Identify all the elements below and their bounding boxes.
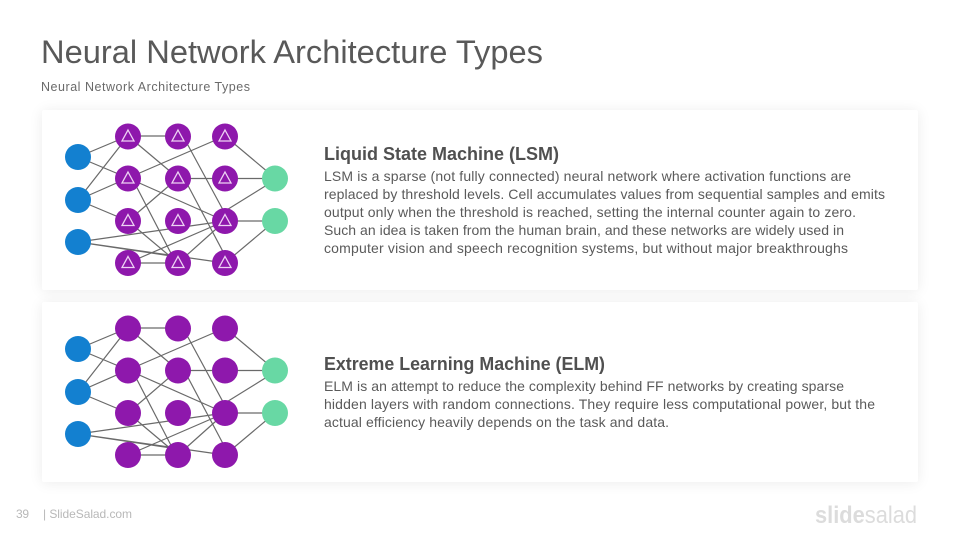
footer source: | SlideSalad.com [43, 507, 132, 521]
network diagram: LSM [65, 124, 288, 276]
page number: 39 [16, 507, 29, 521]
heading: LSM: Liquid State Machine (LSM) [324, 143, 559, 164]
panel: ELM card [42, 302, 918, 482]
subtitle: Neural Network Architecture Types [41, 80, 250, 94]
title: Neural Network Architecture Types [41, 34, 543, 70]
text block: LSM description: LSM is a sparse (not fully connected) neural network where activation functions are [324, 168, 851, 184]
logo: slidesalad: slidesalad [815, 502, 917, 529]
text block: ELM description: actual efficiency heavily depends on the task and data. [324, 414, 669, 430]
text block: LSM description: computer vision and speech recognition systems, but without major breakthroughs [324, 240, 848, 256]
network diagram: ELM [65, 316, 288, 468]
heading: ELM: Extreme Learning Machine (ELM) [324, 353, 605, 374]
text block: LSM description: Such an idea is taken from the human brain, and these networks are widely used in [324, 222, 844, 238]
text block: ELM description [324, 378, 875, 430]
text block: LSM description: replaced by threshold levels. Cell accumulates values from sequential samples and emits [324, 186, 885, 202]
text block: ELM description: ELM is an attempt to reduce the complexity behind FF networks by creating sparse [324, 378, 844, 394]
text block: LSM description: output only when the threshold is reached, setting the internal counter again to zero. [324, 204, 856, 220]
text block: LSM description [324, 168, 885, 256]
threshold triangles [122, 130, 231, 268]
text block: ELM description: hidden layers with random connections. They require less computational power, but the [324, 396, 875, 412]
panel: LSM card [42, 110, 918, 290]
